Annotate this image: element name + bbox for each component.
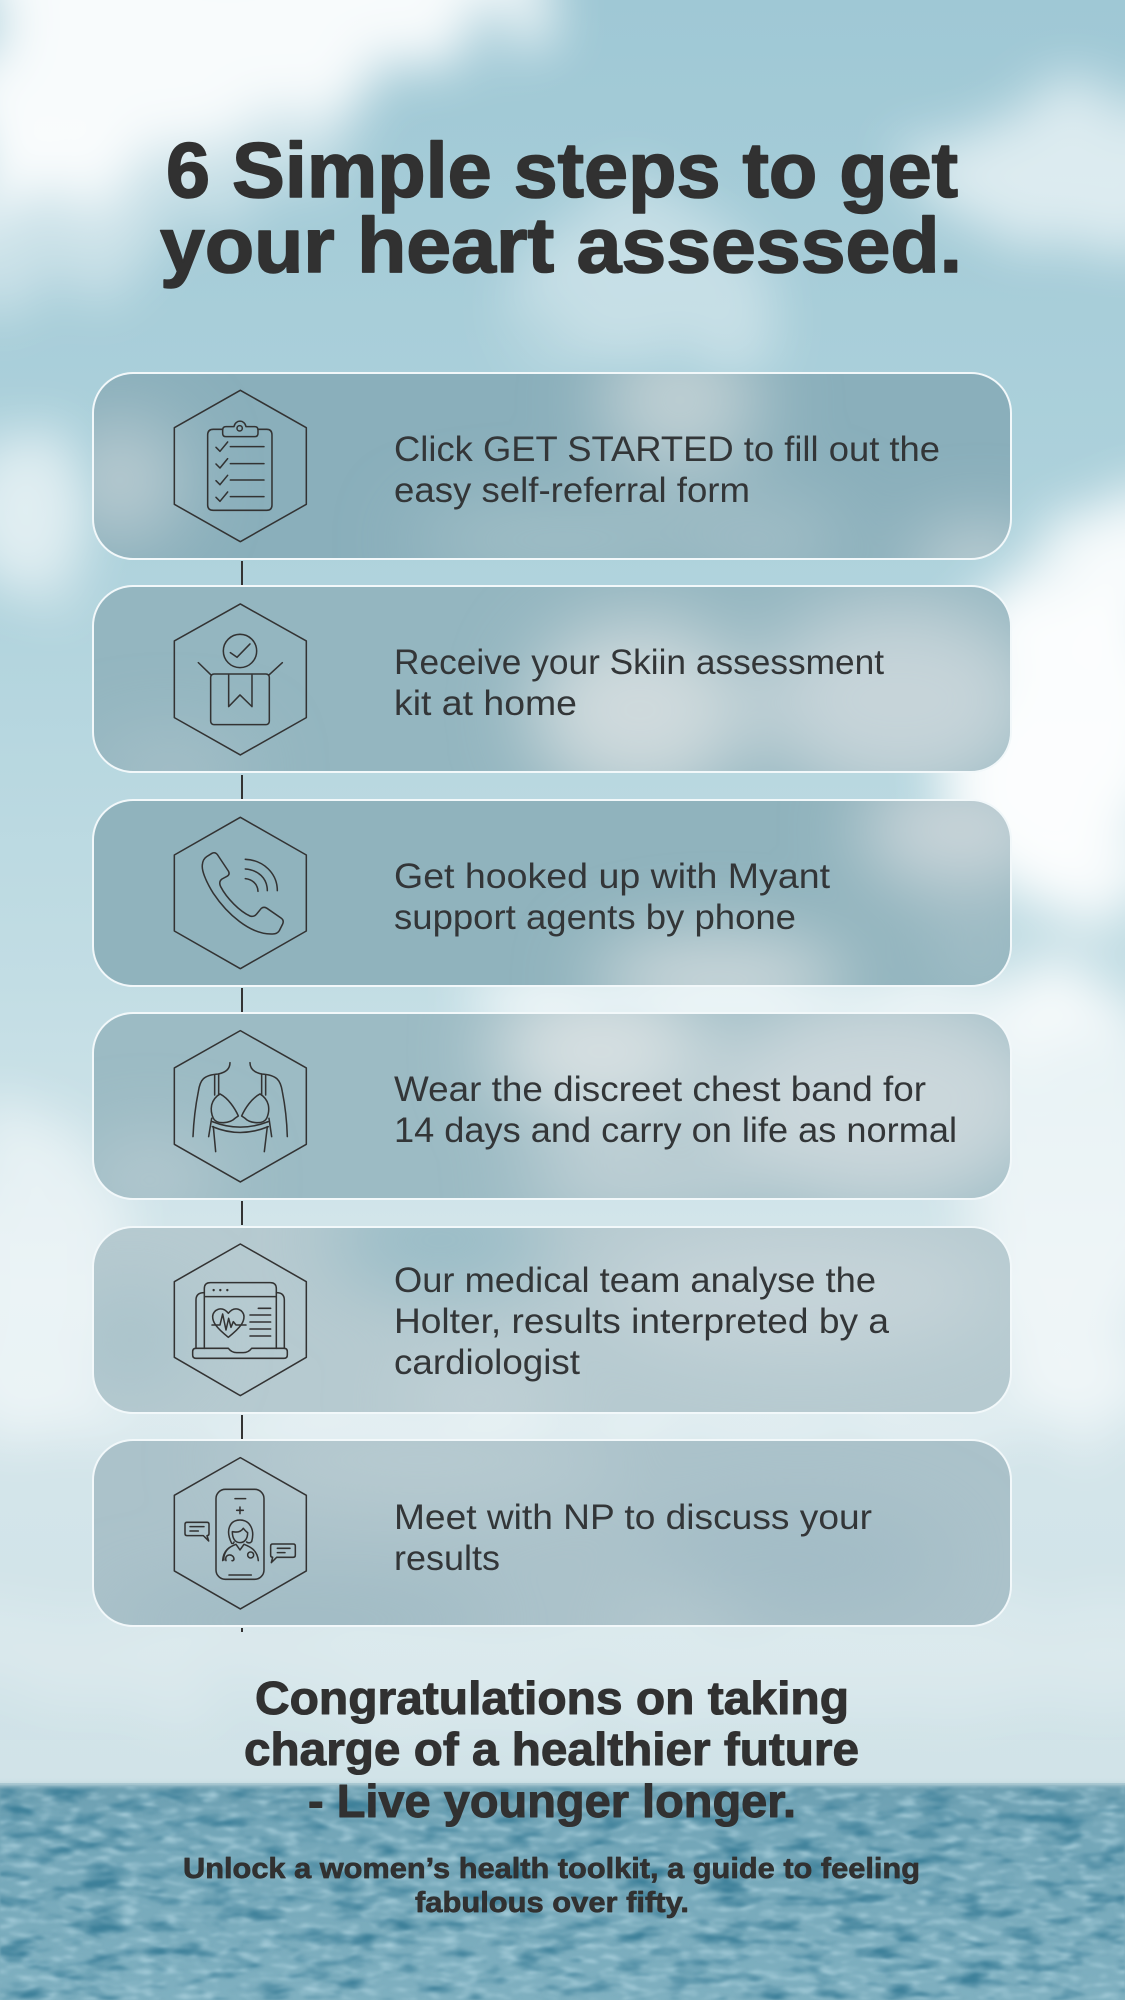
- closing subtext: Unlock a women’s health toolkit, a guide to feeling: [183, 1853, 920, 1885]
- icon: clipboard checklist: [174, 390, 306, 542]
- text: step 4: Wear the discreet chest band for: [394, 1070, 926, 1109]
- text: step 1: easy self-referral form: [394, 471, 750, 510]
- text: step 3: Get hooked up with Myant: [394, 857, 830, 896]
- panel: step 3: [92, 799, 1012, 987]
- closing subtext: [183, 1853, 920, 1919]
- text: step 2: kit at home: [394, 684, 577, 723]
- text: step 3: support agents by phone: [394, 898, 796, 937]
- text: step 2: Receive your Skiin assessment: [394, 643, 884, 682]
- text: step 5: Holter, results interpreted by a: [394, 1302, 890, 1341]
- closing heading: - Live younger longer.: [308, 1775, 796, 1827]
- background: sea: [0, 1778, 1125, 2000]
- title: [160, 126, 962, 289]
- text: step 6: Meet with NP to discuss your: [394, 1498, 872, 1537]
- connector lines between steps: [241, 561, 243, 1632]
- text: step 3: [394, 857, 830, 937]
- text: step 6: results: [394, 1539, 500, 1578]
- closing heading: charge of a healthier future: [244, 1723, 859, 1775]
- text: step 5: cardiologist: [394, 1343, 580, 1382]
- icon: phone with signal: [174, 817, 306, 969]
- text: step 1: [394, 430, 940, 510]
- text: step 2: [394, 643, 884, 723]
- text: step 6: [394, 1498, 872, 1578]
- panel: step 5: [92, 1226, 1012, 1414]
- text: step 1: Click GET STARTED to fill out the: [394, 430, 940, 469]
- panel: step 1: [92, 372, 1012, 560]
- panel: step 6: [92, 1439, 1012, 1627]
- closing heading: Congratulations on taking: [255, 1672, 849, 1724]
- icon: torso with chest band: [174, 1031, 306, 1182]
- icon: laptop with heart chart: [174, 1244, 306, 1396]
- panel: step 4: [92, 1012, 1012, 1200]
- text: step 4: 14 days and carry on life as normal: [394, 1111, 957, 1150]
- title: your heart assessed.: [160, 201, 962, 289]
- text: step 4: [394, 1070, 957, 1150]
- icon: delivery box with check: [174, 604, 306, 755]
- panel: step 2: [92, 585, 1012, 773]
- closing heading: [244, 1672, 859, 1827]
- title: 6 Simple steps to get: [166, 126, 958, 214]
- icon: doctor on phone: [174, 1458, 306, 1609]
- text: step 5: Our medical team analyse the: [394, 1261, 876, 1300]
- closing subtext: fabulous over fifty.: [415, 1887, 689, 1919]
- text: step 5: [394, 1261, 890, 1382]
